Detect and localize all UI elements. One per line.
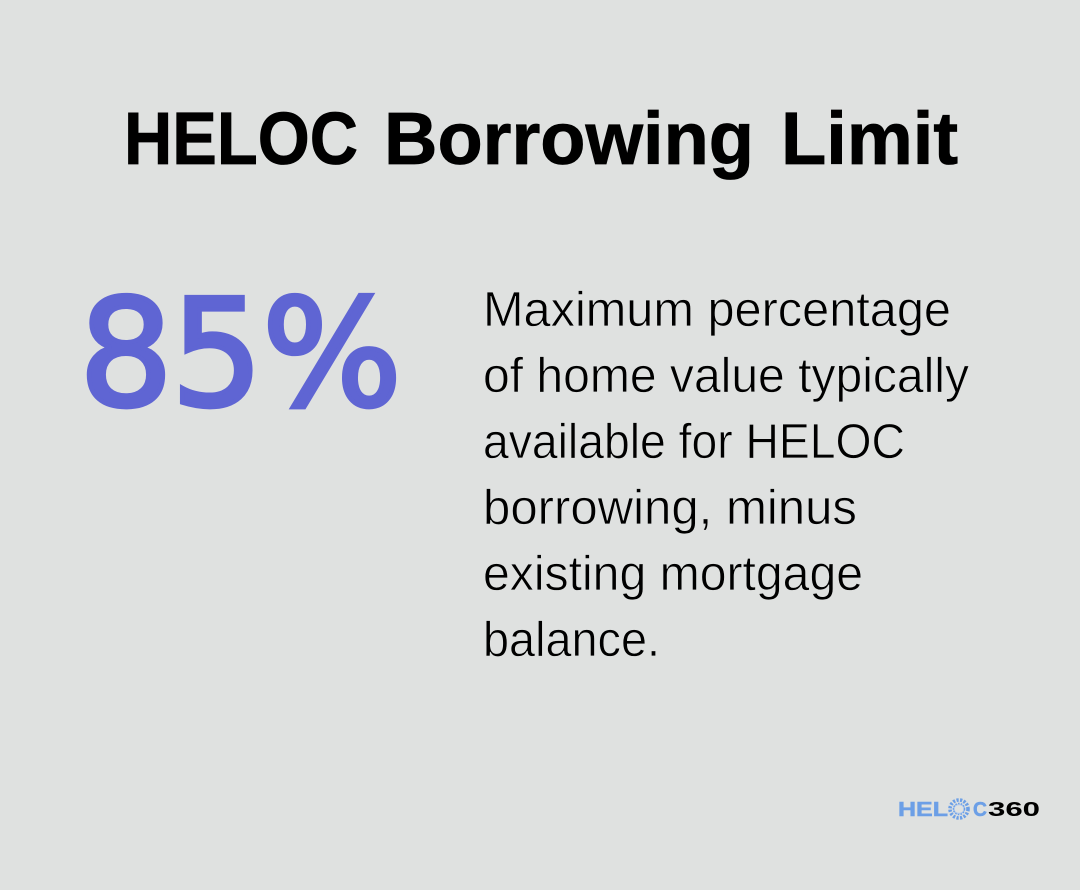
description text block: available for HELOC <box>483 415 905 469</box>
title: HELOC <box>124 97 358 180</box>
title <box>124 97 958 180</box>
big statistic: 85%: % <box>262 268 402 440</box>
logo wordmark 360: 360 <box>988 799 1040 821</box>
title: Borrowing <box>384 97 754 180</box>
big statistic: 85%: 8 <box>79 268 173 440</box>
description text block: Maximum percentage <box>483 283 951 337</box>
description text block: balance. <box>483 613 660 667</box>
big statistic: 85%: 5 <box>171 268 263 440</box>
description text block: borrowing, minus <box>483 481 857 535</box>
logo wordmark C: C <box>973 799 987 821</box>
logo swirl letter O <box>950 800 968 818</box>
logo swirl letter O: O <box>952 801 966 818</box>
logo: HELOC360 <box>898 799 1040 821</box>
logo wordmark HEL: HEL <box>898 799 948 821</box>
big statistic: 85% <box>79 268 402 440</box>
description text block: of home value typically <box>483 349 969 403</box>
description text block <box>483 283 969 667</box>
description text block: existing mortgage <box>483 547 863 601</box>
title: Limit <box>781 97 958 180</box>
